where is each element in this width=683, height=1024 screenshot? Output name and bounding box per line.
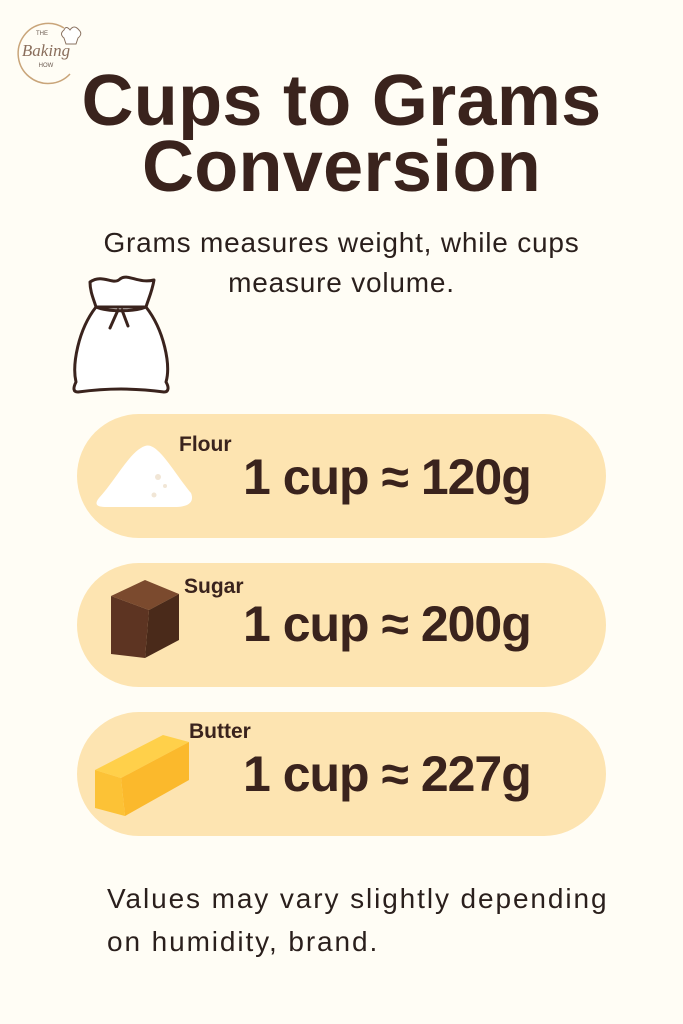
- icon: butter stick: [95, 735, 189, 816]
- logo: Baking: [22, 41, 70, 60]
- label: sugar: Sugar: [184, 575, 244, 598]
- panel: flour: [77, 414, 606, 538]
- icon: sugar cube: [111, 580, 179, 658]
- panel: sugar: [77, 563, 606, 687]
- icon: flour pile: [96, 446, 192, 507]
- title: [82, 61, 602, 207]
- logo: HOW: [39, 63, 54, 69]
- subtitle: measure volume.: [228, 267, 455, 298]
- footer note: on humidity, brand.: [107, 926, 379, 957]
- value: flour: 1 cup ≈ 120g: [243, 449, 531, 505]
- footer note: Values may vary slightly depending: [107, 883, 608, 914]
- label: flour: Flour: [179, 433, 232, 456]
- subtitle: Grams measures weight, while cups: [103, 227, 580, 258]
- panel: butter: [77, 712, 606, 836]
- icon: flour sack: [72, 276, 170, 394]
- logo: THE: [36, 31, 48, 37]
- title: Cups to Grams: [82, 61, 602, 141]
- value: butter: 1 cup ≈ 227g: [243, 746, 531, 802]
- title: Conversion: [142, 127, 541, 207]
- logo: [17, 22, 82, 84]
- label: butter: Butter: [189, 720, 251, 743]
- value: sugar: 1 cup ≈ 200g: [243, 596, 531, 652]
- subtitle: [103, 227, 580, 298]
- footer note: [107, 883, 608, 957]
